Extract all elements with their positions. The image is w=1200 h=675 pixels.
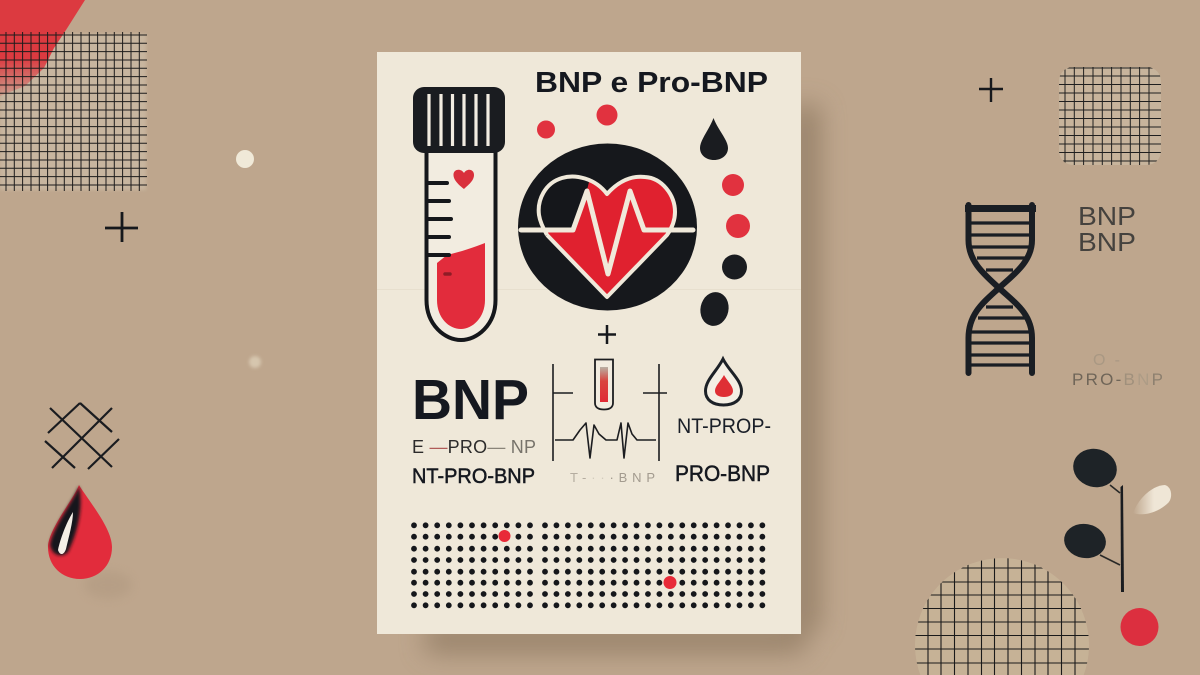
- label: PRO-BNP right: PRO-BNP: [675, 461, 770, 486]
- red circle: [1120, 608, 1158, 646]
- red dot: [498, 530, 510, 542]
- icon: small heart: [453, 170, 474, 189]
- red corner shape: [0, 0, 85, 96]
- label: BNP right second: BNP: [1078, 227, 1136, 257]
- grid tint: top left: [0, 34, 146, 190]
- poster shadow: [425, 105, 820, 653]
- grid: bottom circle: [915, 558, 1089, 675]
- red dot: [664, 576, 676, 589]
- icon: DNA helix: [965, 205, 1036, 373]
- plus: poster: [598, 325, 616, 344]
- dot grid: [414, 525, 764, 605]
- label: faded PRO-BNP right: PRO-BNP: [1072, 370, 1163, 389]
- cream leaf: [1133, 485, 1171, 514]
- panel: poster: [377, 52, 801, 634]
- chart: center ecg frame: [553, 360, 667, 461]
- icon: outlined drop: [706, 359, 742, 405]
- grid: top right: [1059, 67, 1161, 165]
- icon: small tube: [595, 360, 613, 410]
- label: faint PRO: O-: [1093, 352, 1120, 369]
- label: BNP large: BNP: [412, 368, 529, 432]
- label: faint BNP: T- ·· ·BNP: [570, 470, 655, 485]
- title: BNP e Pro-BNP: [535, 67, 768, 99]
- icon: test tube: [413, 87, 505, 340]
- faint dot: [249, 356, 261, 368]
- cream dot: [236, 150, 254, 168]
- label: NT-PROP: NT-PROP-: [677, 415, 771, 438]
- black droplets: [697, 118, 747, 329]
- label: faded pro-bnp: E —PRO— NP: [412, 437, 536, 457]
- plus: right: [979, 78, 1003, 102]
- red dots: [537, 104, 750, 238]
- plus: left: [105, 212, 138, 242]
- icon: heart with pulse: [518, 144, 697, 310]
- grid: top left: [0, 32, 147, 191]
- icon: blood drop: [48, 485, 132, 599]
- lattice icon: [45, 403, 119, 469]
- label: BNP right: BNP: [1078, 201, 1136, 231]
- label: NT-PRO-BNP left: NT-PRO-BNP: [412, 465, 535, 488]
- icon: branch with leaves: [1061, 444, 1171, 592]
